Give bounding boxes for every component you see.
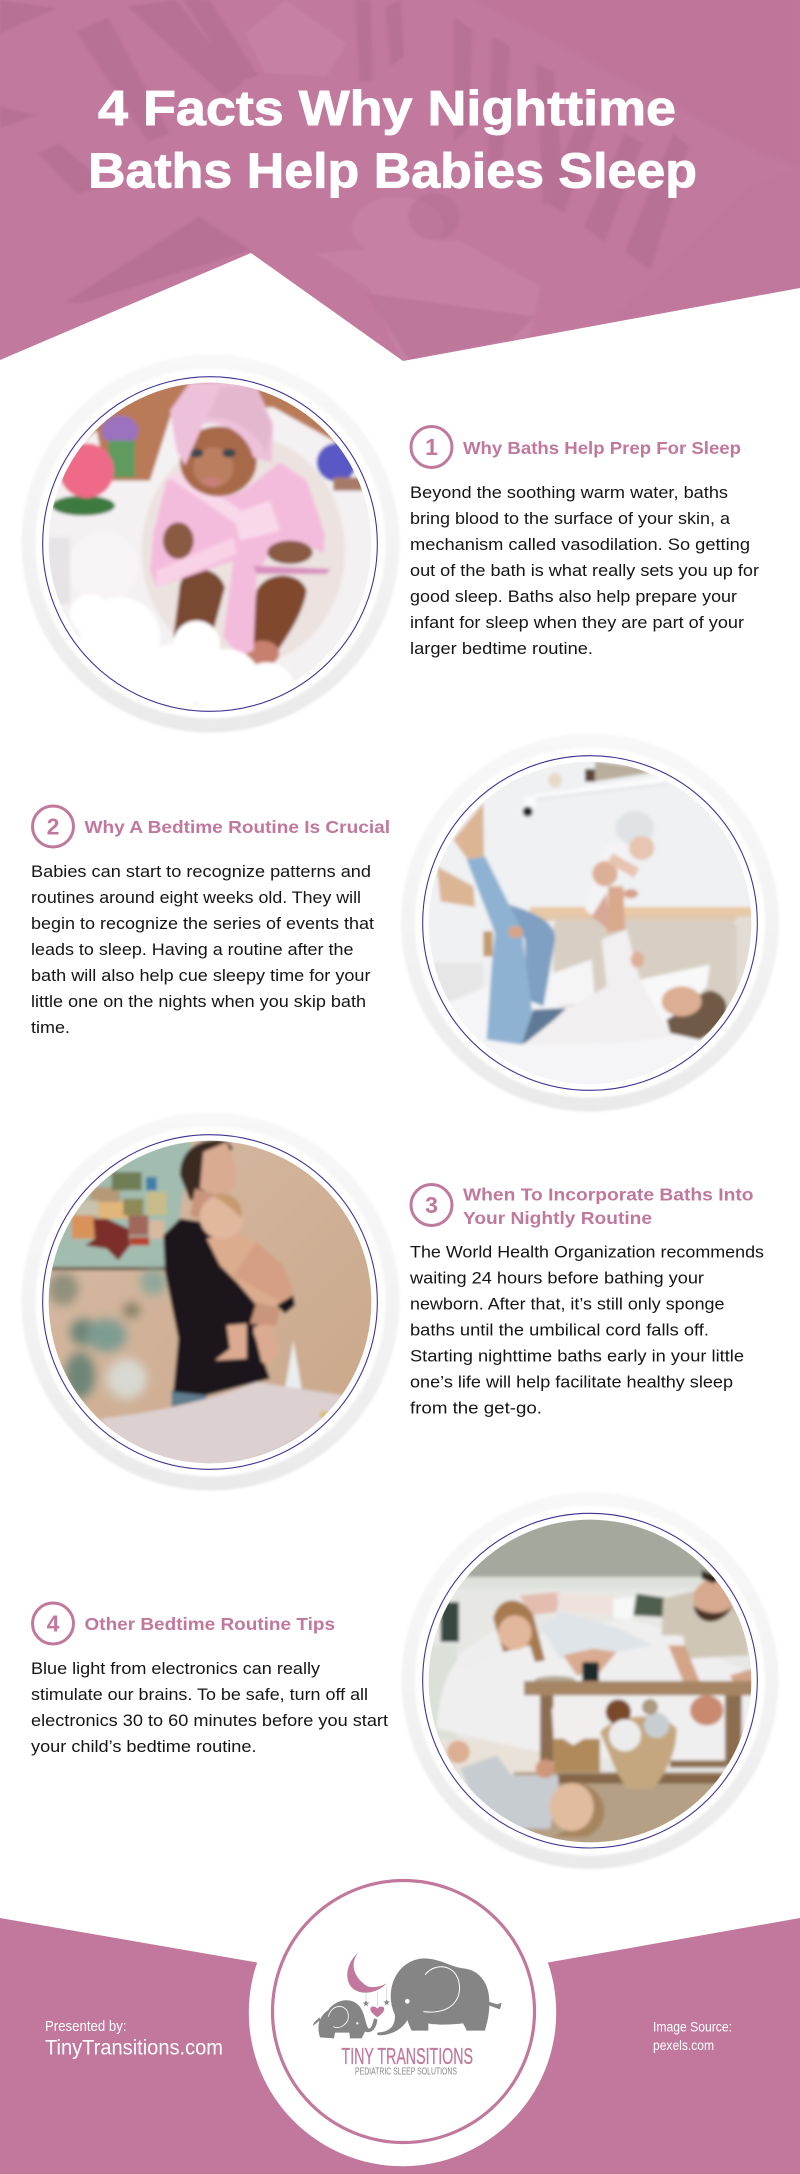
- body text 4: Blue light from electronics can really: [31, 1660, 321, 1678]
- banner background photo: crib and sleeping baby: [2, 1, 686, 360]
- fact 3 text block: [409, 1184, 764, 1418]
- presented by: [45, 2019, 223, 2060]
- body text 1: bring blood to the surface of your skin, a: [410, 510, 731, 528]
- heading 2: Why A Bedtime Routine Is Crucial: [84, 817, 390, 837]
- image source: [653, 2020, 732, 2053]
- fact 2 text block: [31, 806, 390, 1037]
- photo medallion 3: mother holding newborn: [22, 1112, 400, 1490]
- number badge 3: 3: [425, 1192, 438, 1218]
- body text 3: from the get-go.: [410, 1400, 542, 1418]
- body text 1: mechanism called vasodilation. So getting: [410, 536, 750, 554]
- logo: elephants, moon and wordmark: TINY TRANSITIONS: [342, 2043, 473, 2069]
- number badge 1: 1: [425, 434, 438, 460]
- body text 3: one’s life will help facilitate healthy sleep: [410, 1374, 733, 1392]
- body text 3: [409, 1244, 764, 1418]
- footer band: [0, 1859, 800, 2174]
- logo: elephants, moon and wordmark: [313, 1953, 502, 2078]
- heading 4: Other Bedtime Routine Tips: [84, 1614, 335, 1634]
- logo: elephants, moon and wordmark: PEDIATRIC SLEEP SOLUTIONS: [355, 2066, 457, 2078]
- photo medallion 2: mother lifting baby on bed: [401, 734, 779, 1112]
- body text 2: time.: [31, 1019, 70, 1037]
- title: [88, 82, 697, 198]
- body text 3: waiting 24 hours before bathing your: [409, 1270, 705, 1288]
- body text 1: Beyond the soothing warm water, baths: [410, 484, 728, 502]
- body text 2: routines around eight weeks old. They will: [31, 889, 361, 907]
- presented by: TinyTransitions.com: [45, 2036, 223, 2060]
- photo medallion 1: baby in pink robe: [22, 354, 400, 732]
- body text 2: Babies can start to recognize patterns and: [31, 863, 371, 881]
- number badge 1: [411, 426, 452, 468]
- icon: big elephant: [377, 1958, 502, 2035]
- body text 2: little one on the nights when you skip bath: [31, 993, 366, 1011]
- number badge 3: [411, 1184, 452, 1226]
- logo circle: [249, 1859, 556, 2166]
- body text 2: leads to sleep. Having a routine after the: [31, 941, 354, 959]
- body text 4: electronics 30 to 60 minutes before you start: [31, 1712, 388, 1730]
- heading 3: When To Incorporate Baths Into: [463, 1184, 754, 1204]
- image source: pexels.com: [653, 2038, 714, 2053]
- fact 1 text block: [410, 426, 760, 658]
- number badge 4: [32, 1603, 74, 1644]
- number badge 4: 4: [47, 1610, 60, 1636]
- title: 4 Facts Why Nighttime: [98, 82, 676, 136]
- heading 3: Your Nightly Routine: [463, 1208, 652, 1228]
- photo medallion 4: family in bedroom: [402, 1492, 778, 1869]
- body text 1: good sleep. Baths also help prepare your: [410, 588, 738, 606]
- number badge 2: 2: [47, 814, 59, 840]
- body text 1: [410, 484, 760, 658]
- body text 1: infant for sleep when they are part of your: [410, 614, 745, 632]
- heading 1: Why Baths Help Prep For Sleep: [463, 438, 741, 458]
- body text 3: The World Health Organization recommends: [410, 1244, 764, 1262]
- body text 3: newborn. After that, it’s still only sponge: [410, 1296, 724, 1314]
- body text 4: [31, 1660, 388, 1756]
- body text 2: bath will also help cue sleepy time for your: [31, 967, 371, 985]
- body text 3: Starting nighttime baths early in your little: [410, 1348, 744, 1366]
- body text 4: your child’s bedtime routine.: [31, 1738, 256, 1756]
- header banner: [0, 0, 800, 363]
- body text 1: out of the bath is what really sets you up for: [410, 562, 760, 580]
- body text 1: larger bedtime routine.: [410, 640, 593, 658]
- heading 3: [463, 1184, 754, 1228]
- number badge 2: [32, 806, 74, 847]
- body text 4: stimulate our brains. To be safe, turn off all: [31, 1686, 368, 1704]
- body text 3: baths until the umbilical cord falls off.: [410, 1322, 709, 1340]
- body text 2: begin to recognize the series of events that: [31, 915, 374, 933]
- fact 4 text block: [31, 1603, 388, 1756]
- title: Baths Help Babies Sleep: [88, 144, 697, 198]
- icon: baby elephant: [313, 2000, 377, 2038]
- icon: hanging heart and stars: [363, 1987, 390, 2017]
- presented by: Presented by:: [45, 2019, 126, 2035]
- body text 2: [31, 863, 374, 1037]
- icon: crescent moon: [347, 1953, 387, 1993]
- image source: Image Source:: [653, 2020, 732, 2034]
